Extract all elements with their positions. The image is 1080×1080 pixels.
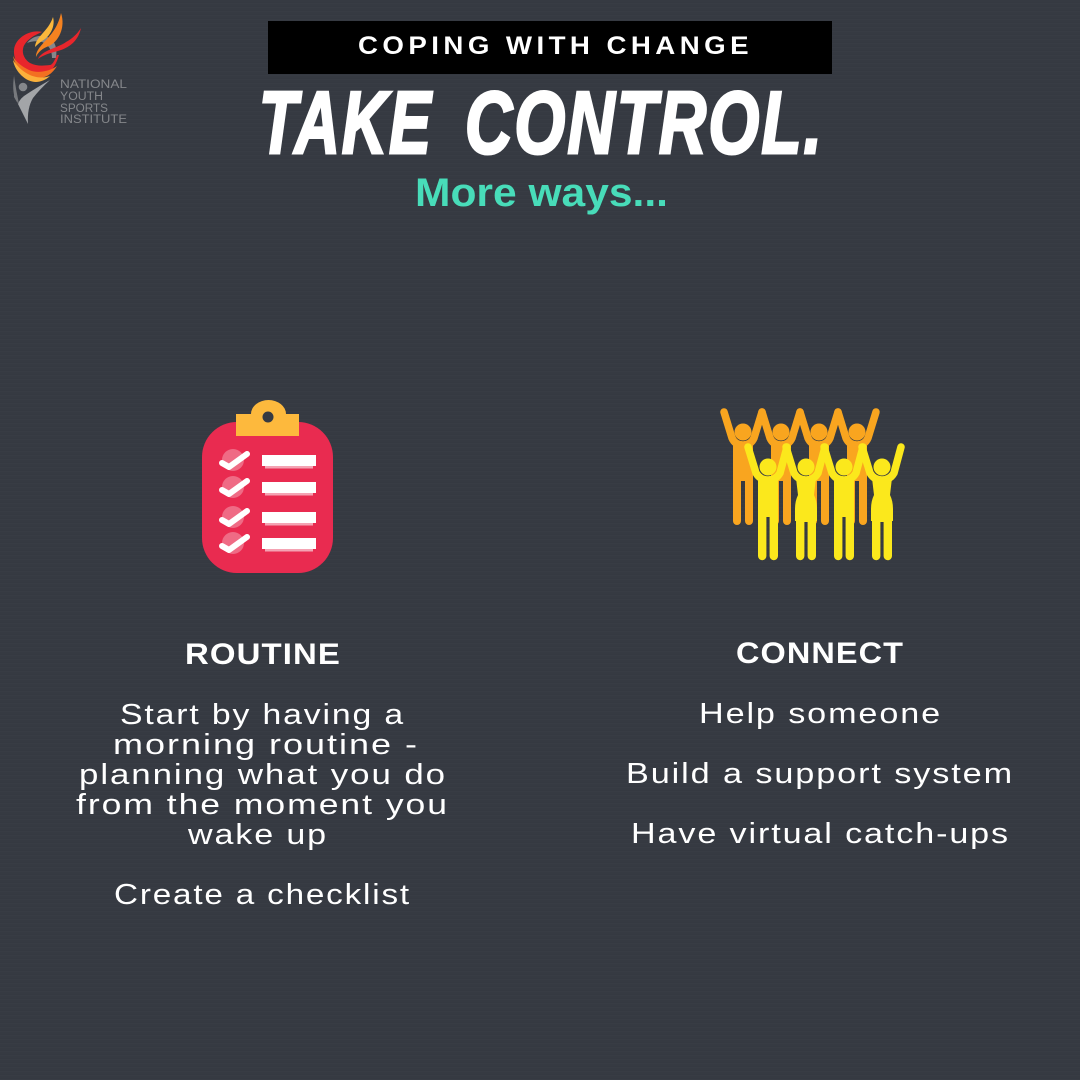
text block: routine advice: wake up bbox=[187, 819, 328, 851]
logo wordmark bbox=[60, 79, 128, 126]
icon: group of people with raised arms bbox=[724, 412, 901, 560]
banner: Coping with change: COPING WITH CHANGE bbox=[358, 32, 753, 60]
heading: connect: CONNECT bbox=[736, 637, 904, 670]
text block: connect advice: Build a support system bbox=[626, 758, 1014, 790]
text block: routine advice: from the moment you bbox=[76, 789, 449, 821]
logo wordmark: YOUTH bbox=[60, 91, 103, 103]
banner: Coping with change bbox=[268, 21, 832, 74]
logo wordmark: NATIONAL bbox=[60, 79, 128, 91]
text block: connect advice bbox=[626, 698, 1014, 850]
text block: connect advice: Have virtual catch-ups bbox=[631, 818, 1010, 850]
text block: routine advice bbox=[76, 699, 449, 911]
logo wordmark: SPORTS bbox=[60, 103, 108, 115]
panel: routine bbox=[76, 638, 449, 911]
text block: routine advice: Create a checklist bbox=[114, 879, 411, 911]
text block: connect advice: Help someone bbox=[699, 698, 942, 730]
panel: connect bbox=[626, 637, 1014, 850]
title: Take Control: CONTROL. bbox=[465, 73, 824, 172]
icon: flame and athlete mark bbox=[13, 13, 128, 126]
heading: routine: ROUTINE bbox=[185, 638, 341, 671]
logo: National Youth Sports Institute bbox=[13, 13, 128, 126]
title: Take Control: TAKE bbox=[259, 73, 433, 172]
text block: routine advice: Start by having a bbox=[120, 699, 405, 731]
icon: clipboard checklist bbox=[202, 400, 333, 573]
text block: routine advice: morning routine - bbox=[113, 729, 419, 761]
logo wordmark: INSTITUTE bbox=[60, 114, 127, 126]
subtitle: More ways: More ways... bbox=[415, 171, 668, 215]
text block: routine advice: planning what you do bbox=[79, 759, 447, 791]
